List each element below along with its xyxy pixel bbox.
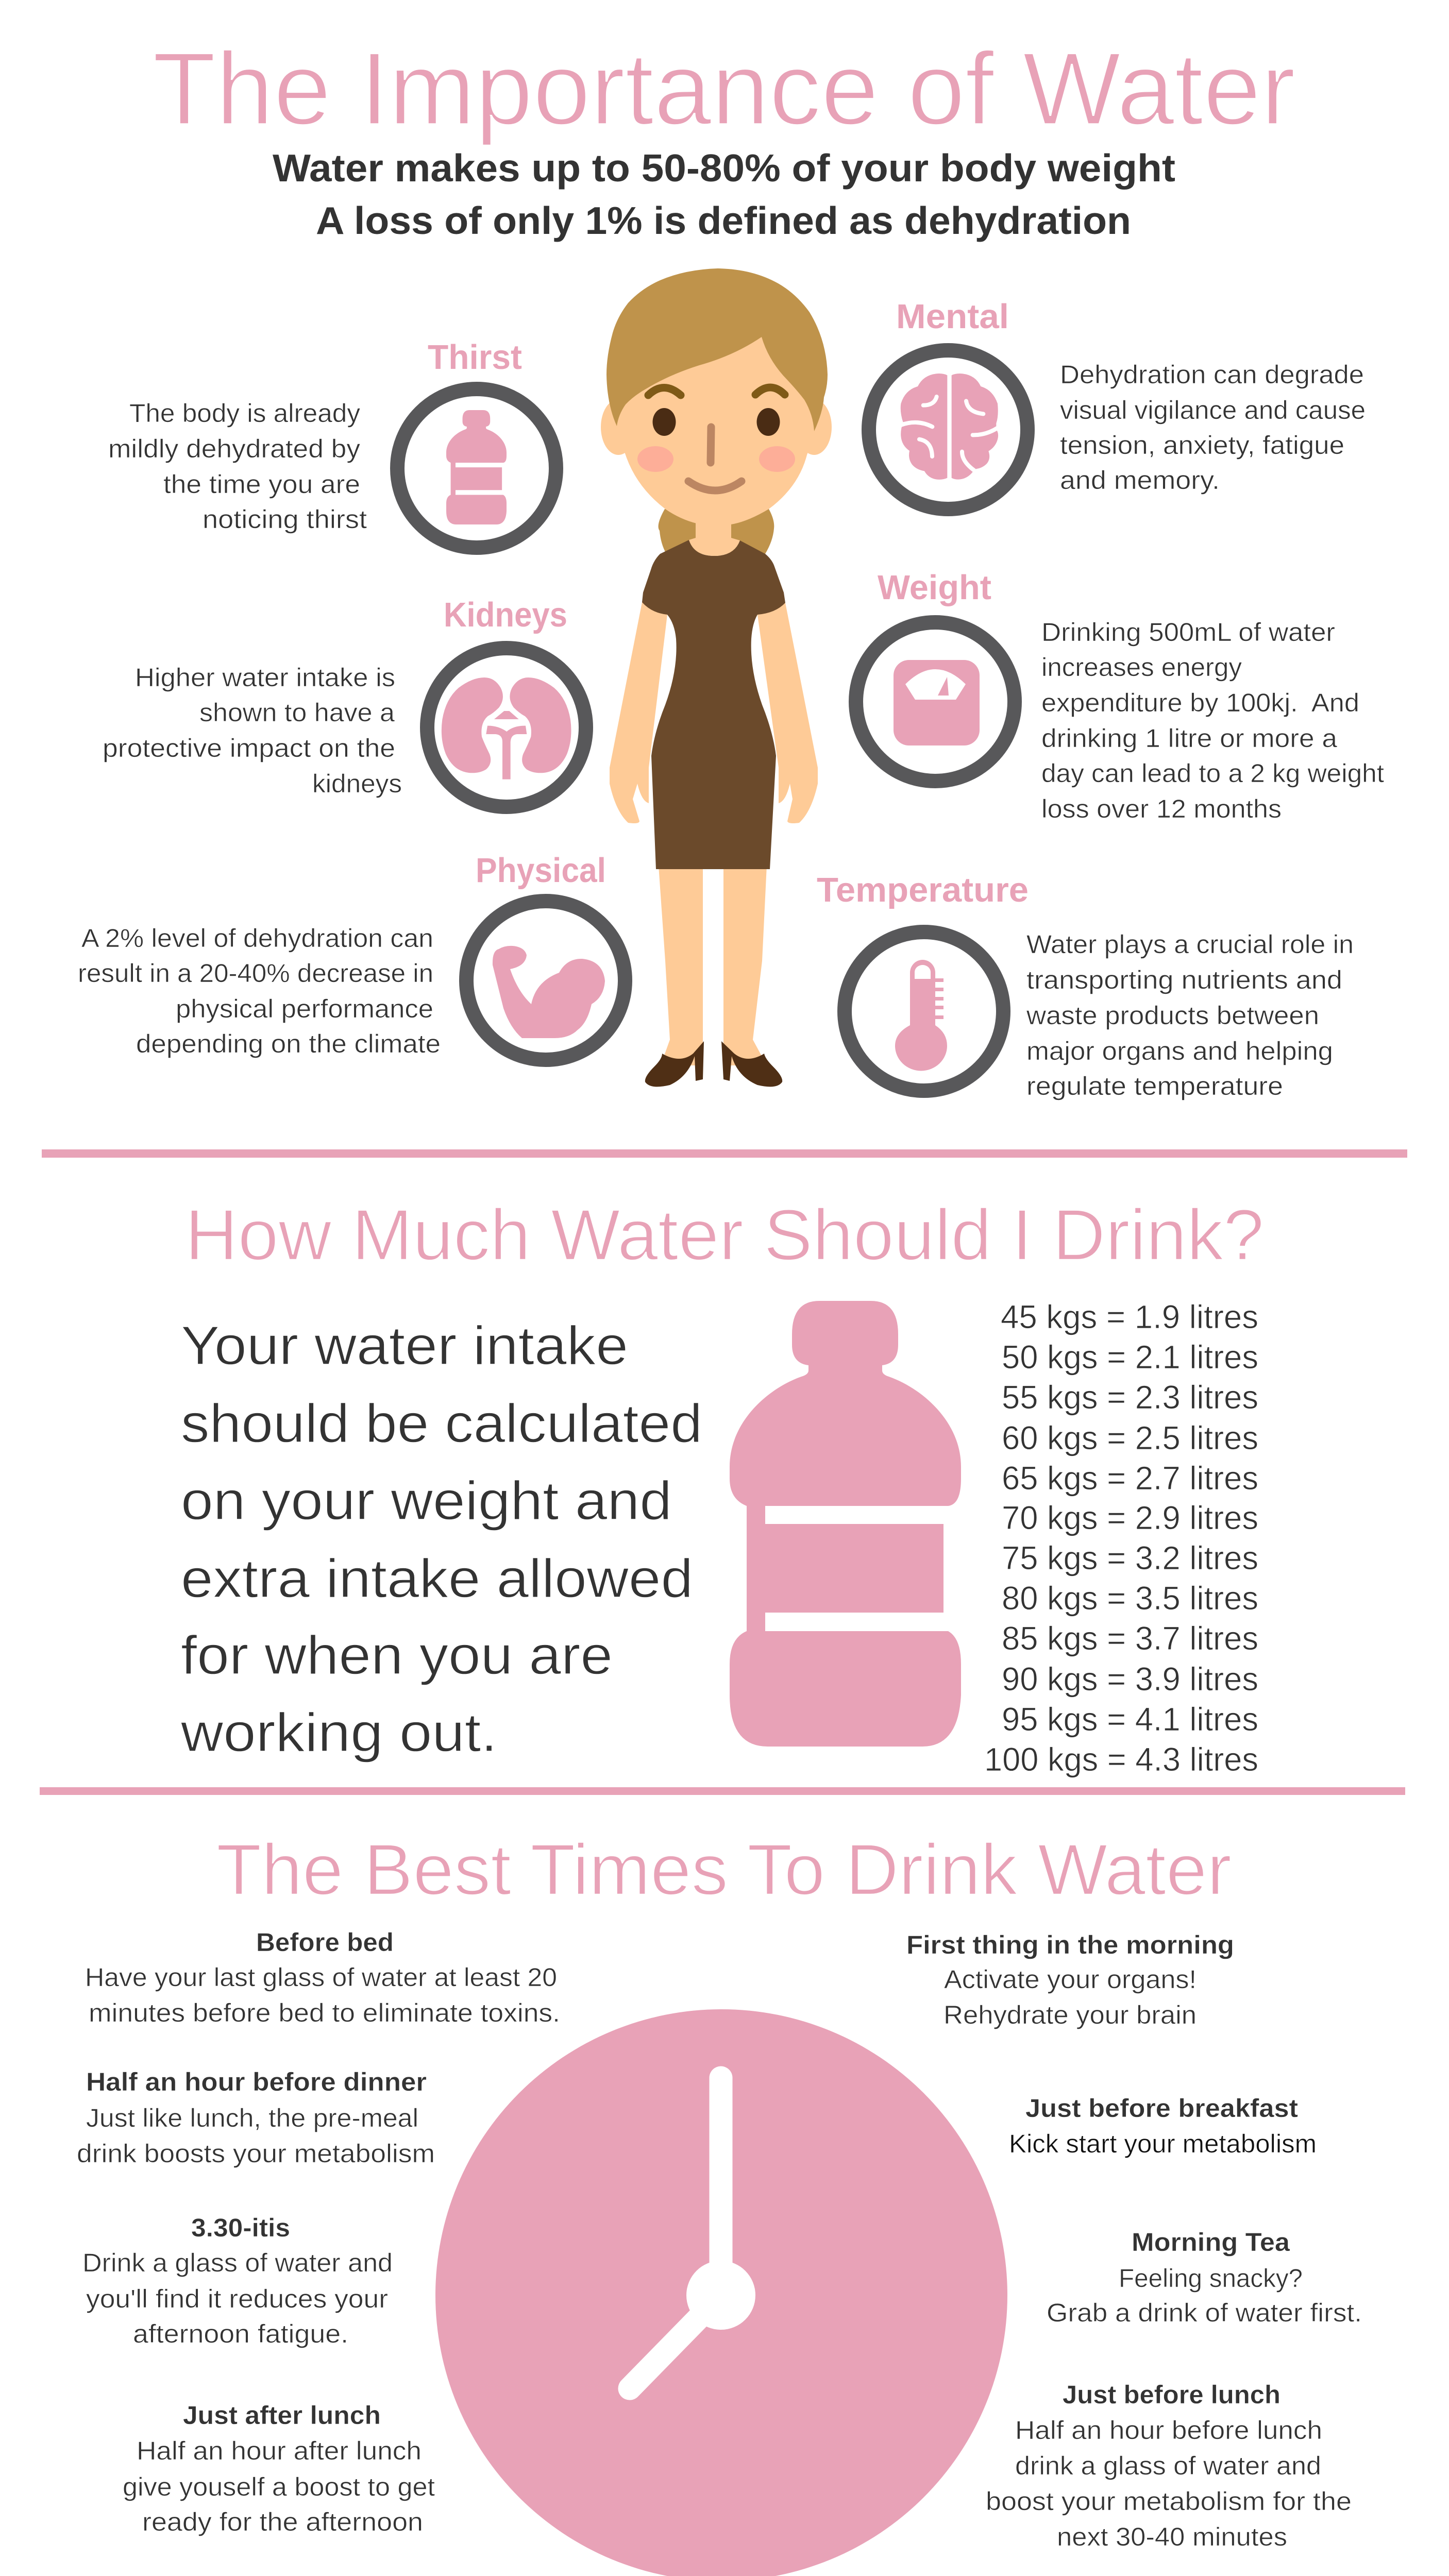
illustration: woman [601, 268, 832, 1087]
text [1026, 930, 1354, 1100]
hair behind neck [659, 509, 774, 554]
text: before bed: Before bed [256, 1928, 394, 1957]
panel: kidneys [103, 596, 586, 807]
title: The Importance of Water [153, 31, 1295, 146]
face [616, 330, 817, 527]
text: before bed: minutes before bed to eliminate toxins. [89, 1998, 560, 2027]
text: first thing in the morning [906, 1930, 1234, 2029]
heading: Weight [878, 568, 991, 607]
text: The body is already [129, 399, 360, 428]
text: just before lunch [986, 2380, 1352, 2551]
text: Dehydration can degrade [1060, 360, 1364, 389]
hair [606, 268, 828, 431]
text: day can lead to a 2 kg weight [1041, 759, 1384, 788]
text: 3.30-itis: afternoon fatigue. [133, 2319, 348, 2348]
text: just before breakfast [1009, 2094, 1317, 2158]
text block: intake paragraph: for when you are [181, 1625, 613, 1686]
text: major organs and helping [1026, 1037, 1333, 1065]
text: just after lunch: Just after lunch [183, 2401, 381, 2430]
text: just before lunch: next 30-40 minutes [1057, 2522, 1287, 2551]
subtitle [273, 146, 1175, 242]
panel: temperature [817, 871, 1354, 1100]
text: morning tea: Feeling snacky? [1119, 2264, 1303, 2293]
text: morning tea [1047, 2228, 1362, 2327]
panel: thirst [108, 338, 556, 548]
icon: clock [435, 2009, 1007, 2576]
text: just after lunch [123, 2401, 435, 2536]
list: weight to litres: 95 kgs = 4.1 litres [1002, 1701, 1258, 1738]
text: Higher water intake is [135, 663, 395, 692]
text: mildly dehydrated by [108, 434, 360, 463]
text: protective impact on the [103, 734, 395, 762]
text block: intake paragraph: working out. [180, 1702, 497, 1763]
icon: flexed arm [466, 901, 625, 1060]
text: just before lunch: boost your metabolism for the [986, 2487, 1352, 2516]
text block: intake paragraph [180, 1315, 702, 1763]
text [78, 924, 441, 1058]
icon: kidneys [427, 648, 586, 807]
dress [642, 540, 785, 869]
text: just after lunch: Half an hour after lunch [137, 2436, 422, 2465]
text: regulate temperature [1026, 1072, 1283, 1100]
text: first thing in the morning: First thing in the morning [906, 1930, 1234, 1959]
text: before bed [85, 1928, 560, 2027]
list: weight to litres: 65 kgs = 2.7 litres [1002, 1460, 1258, 1497]
text: just before lunch: drink a glass of water and [1015, 2451, 1321, 2480]
text: first thing in the morning: Rehydrate your brain [943, 2001, 1197, 2029]
list: weight to litres: 55 kgs = 2.3 litres [1002, 1379, 1258, 1416]
text: and memory. [1060, 466, 1220, 495]
text block: intake paragraph: extra intake allowed [181, 1548, 693, 1609]
text: just after lunch: ready for the afternoon [142, 2507, 423, 2536]
list: weight to litres: 100 kgs = 4.3 litres [984, 1741, 1258, 1778]
text: half an hour before dinner: Just like lunch, the pre-meal [86, 2104, 418, 2132]
ears [601, 399, 636, 455]
text: result in a 20-40% decrease in [78, 959, 433, 988]
text: increases energy [1041, 653, 1242, 682]
heading: Mental [896, 297, 1009, 336]
text: A 2% level of dehydration can [81, 924, 433, 953]
text: just before lunch: Just before lunch [1063, 2380, 1280, 2409]
text: just before lunch: Half an hour before lunch [1015, 2416, 1322, 2445]
heading: best times: The Best Times To Drink Water [216, 1829, 1232, 1910]
heading: Temperature [817, 871, 1029, 909]
icon: bottle [397, 389, 556, 548]
icon: scale [856, 622, 1015, 781]
list: weight to litres: 70 kgs = 2.9 litres [1002, 1499, 1258, 1536]
text: loss over 12 months [1041, 794, 1282, 823]
text [108, 399, 367, 534]
text: visual vigilance and cause [1060, 396, 1366, 425]
text: shown to have a [199, 698, 395, 727]
list: weight to litres: 85 kgs = 3.7 litres [1002, 1620, 1258, 1657]
text: Drinking 500mL of water [1041, 618, 1335, 647]
subtitle: A loss of only 1% is defined as dehydration [316, 199, 1131, 242]
panel: physical [78, 851, 625, 1060]
text: tension, anxiety, fatigue [1060, 431, 1344, 460]
text: half an hour before dinner [77, 2067, 435, 2168]
heading: how much water: How Much Water Should I Drink? [185, 1194, 1264, 1275]
icon: large water bottle [730, 1301, 961, 1747]
cheeks [637, 446, 795, 472]
text: morning tea: Grab a drink of water first. [1047, 2298, 1362, 2327]
text block: intake paragraph: Your water intake [181, 1315, 628, 1376]
text block: intake paragraph: should be calculated [181, 1393, 702, 1454]
list: weight to litres: 60 kgs = 2.5 litres [1002, 1419, 1258, 1456]
text: the time you are [163, 470, 360, 499]
text: noticing thirst [203, 505, 367, 534]
shoes [645, 1041, 782, 1087]
text: waste products between [1026, 1001, 1319, 1030]
text: half an hour before dinner: drink boosts your metabolism [77, 2139, 435, 2168]
icon: brain [869, 350, 1027, 509]
heading: Physical [476, 851, 606, 890]
legs [659, 866, 767, 1065]
text [103, 663, 402, 798]
heading: Kidneys [444, 596, 567, 634]
text [1060, 360, 1366, 495]
text [1041, 618, 1384, 823]
text: transporting nutrients and [1026, 965, 1342, 994]
list: weight to litres: 75 kgs = 3.2 litres [1002, 1539, 1258, 1577]
text block: intake paragraph: on your weight and [181, 1470, 672, 1531]
text: morning tea: Morning Tea [1132, 2228, 1290, 2257]
text: half an hour before dinner: Half an hour before dinner [86, 2067, 427, 2096]
arms [610, 602, 818, 823]
text: 3.30-itis [82, 2213, 393, 2348]
eyebrows [648, 387, 785, 395]
nose and mouth [688, 427, 742, 490]
list: weight to litres: 50 kgs = 2.1 litres [1002, 1338, 1258, 1376]
list: weight to litres: 45 kgs = 1.9 litres [1001, 1298, 1258, 1335]
list: weight to litres [984, 1298, 1258, 1778]
text: 3.30-itis: 3.30-itis [191, 2213, 290, 2242]
text: physical performance [176, 994, 433, 1023]
neck [689, 518, 740, 556]
text: first thing in the morning: Activate your organs! [944, 1965, 1197, 1994]
text: just after lunch: give youself a boost to get [123, 2472, 435, 2501]
eyes [652, 408, 780, 436]
list: weight to litres: 80 kgs = 3.5 litres [1002, 1580, 1258, 1617]
panel: weight [856, 568, 1384, 823]
text: drinking 1 litre or more a [1041, 724, 1337, 753]
text: 3.30-itis: you'll find it reduces your [86, 2284, 388, 2313]
text: before bed: Have your last glass of water at least 20 [85, 1963, 557, 1992]
panel: mental [869, 297, 1366, 509]
text: expenditure by 100kj. And [1041, 688, 1359, 717]
heading: Thirst [428, 338, 522, 377]
text: just before breakfast: Just before breakfast [1025, 2094, 1298, 2123]
text: depending on the climate [136, 1029, 441, 1058]
subtitle: Water makes up to 50-80% of your body weight [273, 146, 1175, 190]
text: kidneys [312, 769, 402, 798]
text: 3.30-itis: Drink a glass of water and [82, 2248, 393, 2277]
list: weight to litres: 90 kgs = 3.9 litres [1002, 1660, 1258, 1698]
icon: thermometer [845, 932, 1003, 1091]
text: Water plays a crucial role in [1026, 930, 1354, 959]
text: just before breakfast: Kick start your metabolism [1009, 2129, 1317, 2158]
